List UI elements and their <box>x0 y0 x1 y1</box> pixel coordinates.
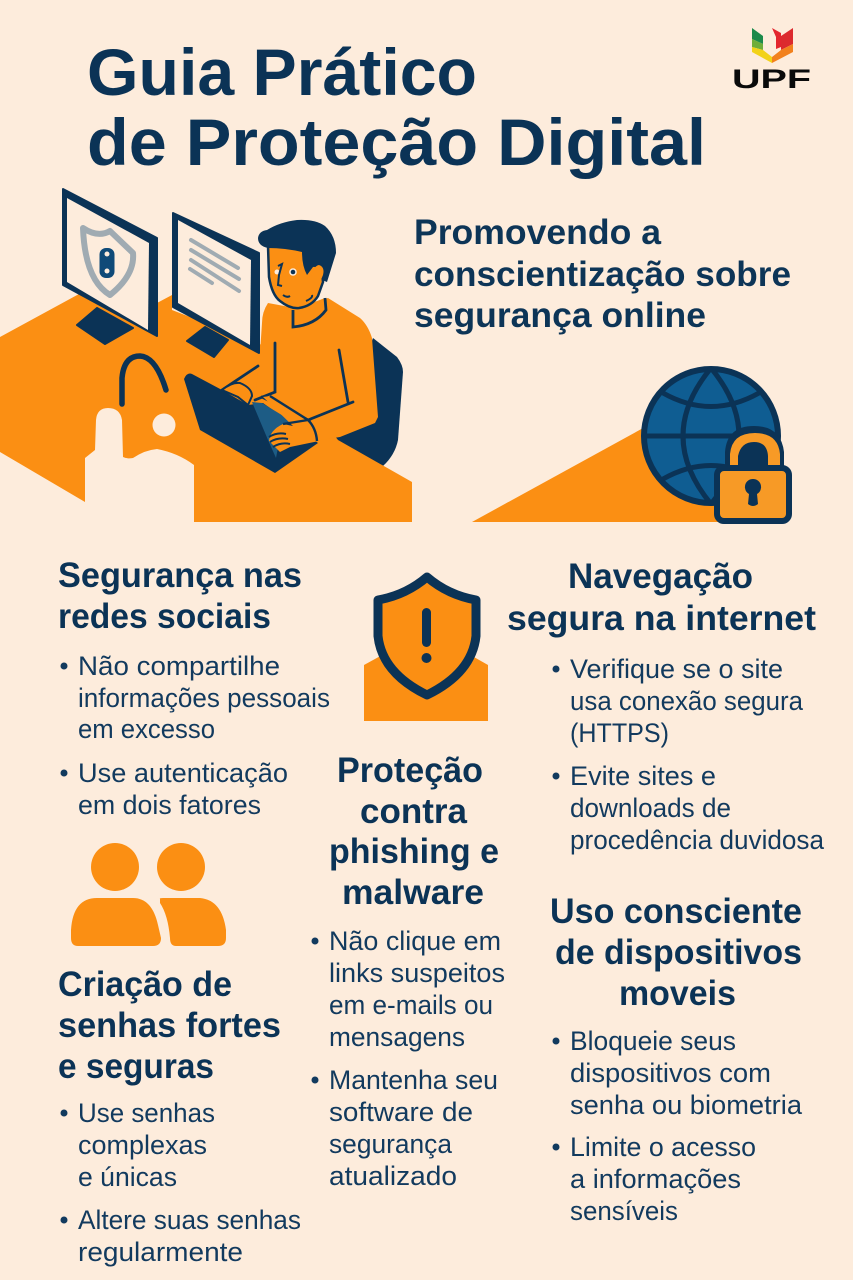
cutout dot <box>152 414 176 436</box>
section: Navegação segura na internet <box>507 557 825 855</box>
open padlock shackle <box>122 356 166 404</box>
bullet list: em excesso <box>78 714 215 744</box>
bullet list: a informações <box>570 1164 741 1194</box>
title: de Proteção Digital <box>87 105 706 179</box>
bullet list: senha ou biometria <box>570 1090 803 1120</box>
monitor stands <box>77 308 133 344</box>
heading: de dispositivos <box>555 933 802 972</box>
heading: phishing e <box>329 832 499 871</box>
bullet list: Mantenha seu <box>329 1065 498 1095</box>
subtitle: segurança online <box>414 296 706 335</box>
hair <box>258 220 336 282</box>
bullet list: dispositivos com <box>570 1058 771 1088</box>
logo: UPF: UPF <box>732 64 811 94</box>
face <box>268 246 323 308</box>
bullet list: regularmente <box>78 1237 243 1267</box>
heading <box>58 556 302 636</box>
heading: Navegação <box>568 557 753 596</box>
heading: e seguras <box>58 1047 214 1086</box>
bullet list: mensagens <box>329 1022 465 1052</box>
logo: UPF <box>732 28 811 94</box>
section: Uso consciente de dispositivos moveis <box>550 892 803 1226</box>
bullet list <box>312 926 505 1191</box>
eyes and mouth <box>289 268 297 276</box>
bullet list: downloads de <box>570 793 731 823</box>
bullet list: informações pessoais <box>78 683 330 713</box>
icon: globe with padlock <box>472 368 789 522</box>
bullet list: Evite sites e <box>570 761 716 791</box>
bullet list: software de <box>329 1097 473 1127</box>
bullet list: Limite o acesso <box>570 1132 756 1162</box>
bullet list: complexas <box>78 1130 207 1160</box>
bullet list: em dois fatores <box>78 790 261 820</box>
neck collar <box>293 298 326 327</box>
bullet list <box>60 651 330 820</box>
bullet list <box>552 654 825 855</box>
section: Criação de senhas fortes e seguras <box>58 965 301 1267</box>
section: Proteção contra phishing e malware <box>312 751 505 1191</box>
bullet list: Não clique em <box>329 926 501 956</box>
torso <box>255 298 378 442</box>
bullet list: em e-mails ou <box>329 990 493 1020</box>
bullet list: procedência duvidosa <box>570 825 825 855</box>
heading: Criação de <box>58 965 232 1004</box>
heading: contra <box>360 792 468 831</box>
subtitle <box>414 213 791 335</box>
heading <box>507 557 816 638</box>
heading: malware <box>342 873 484 912</box>
desk <box>0 288 412 522</box>
bullet list: e únicas <box>78 1162 177 1192</box>
bullet list: Altere suas senhas <box>78 1205 301 1235</box>
bullet list: Use autenticação <box>78 758 288 788</box>
icon: shield alert over envelope <box>364 577 488 721</box>
heading <box>550 892 802 1013</box>
heading: Segurança nas <box>58 556 302 595</box>
heading: redes sociais <box>58 597 271 636</box>
bullet list <box>552 1026 803 1226</box>
bullet list: links suspeitos <box>329 958 505 988</box>
ear <box>311 265 324 287</box>
bullet list: usa conexão segura <box>570 686 804 716</box>
heading: senhas fortes <box>58 1006 281 1045</box>
bullet list: Use senhas <box>78 1098 215 1128</box>
heading: Proteção <box>337 751 483 790</box>
heading: Uso consciente <box>550 892 802 931</box>
bullet list: (HTTPS) <box>570 718 669 748</box>
heading <box>329 751 499 912</box>
bullet list: Não compartilhe <box>78 651 280 681</box>
bullet list: atualizado <box>329 1161 457 1191</box>
bullet list: Bloqueie seus <box>570 1026 736 1056</box>
illustration: person at desk with monitors <box>0 189 412 522</box>
heading <box>58 965 281 1086</box>
title <box>87 35 706 179</box>
bullet list: Verifique se o site <box>570 654 783 684</box>
chair <box>335 338 403 466</box>
right forearm and hand <box>263 396 319 452</box>
section: Segurança nas redes sociais <box>58 556 330 820</box>
title: Guia Prático <box>87 35 477 109</box>
bullet list: sensíveis <box>570 1196 678 1226</box>
monitor: shield <box>63 189 157 336</box>
subtitle: conscientização sobre <box>414 255 791 294</box>
laptop <box>184 374 318 473</box>
left hand <box>222 383 252 405</box>
heading: moveis <box>619 974 736 1013</box>
subtitle: Promovendo a <box>414 213 662 252</box>
bullet list: segurança <box>329 1129 453 1159</box>
monitor: text <box>173 213 259 353</box>
heading: segura na internet <box>507 599 816 638</box>
icon: two people <box>71 843 226 946</box>
bullet list <box>60 1098 301 1267</box>
